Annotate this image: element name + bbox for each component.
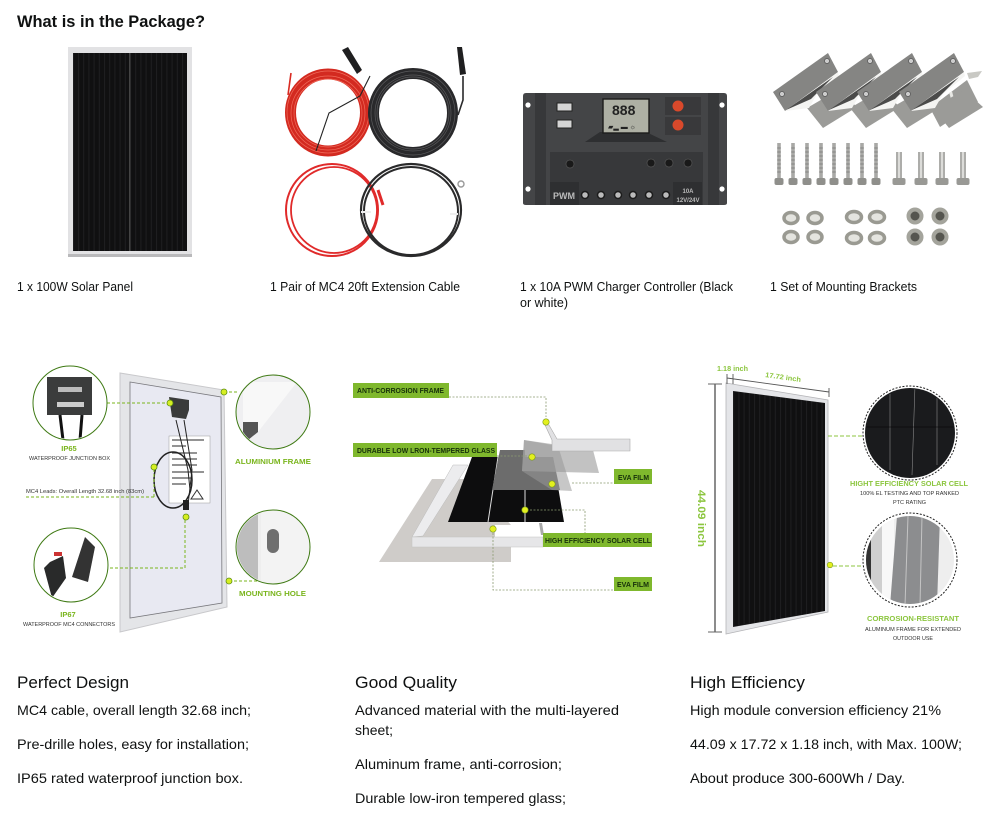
label: width: 17.72 inch	[765, 372, 801, 384]
upper EVA film	[522, 440, 599, 473]
panel back view	[120, 373, 227, 632]
yellow markers	[490, 419, 555, 532]
panel: high efficiency dimensions diagram	[695, 366, 968, 642]
caption: charge controller: or white)	[520, 296, 568, 310]
tag: EVA film lower	[614, 577, 652, 591]
text block: high efficiency	[690, 702, 962, 786]
PWM label: PWM	[553, 191, 575, 201]
text block: perfect design	[17, 702, 251, 786]
second EVA film	[522, 440, 572, 491]
label: mounting hole: MOUNTING HOLE	[239, 591, 306, 598]
label: waterproof MC4 connectors: WATERPROOF MC4 CONNECTORS	[23, 622, 115, 628]
icon: solar panel	[68, 47, 192, 257]
caption: charge controller	[520, 280, 734, 310]
tag: EVA film lower: EVA FILM	[617, 580, 649, 589]
LCD display: ▰▂ ▬ ☼	[608, 124, 636, 131]
caption: brackets: 1 Set of Mounting Brackets	[770, 280, 917, 294]
label: IP67: IP67	[60, 610, 76, 619]
panel: perfect design diagram	[23, 366, 311, 632]
title: What is in the Package?	[17, 12, 205, 31]
callout: junction box	[33, 366, 107, 440]
green markers	[151, 389, 232, 584]
green connectors	[26, 392, 278, 581]
text block: high efficiency: High module conversion efficiency 21%	[690, 702, 941, 718]
caption: solar panel: 1 x 100W Solar Panel	[17, 280, 133, 294]
LCD display: 888	[612, 102, 636, 118]
callout: frame closeup	[863, 513, 957, 607]
framed solar panel	[726, 383, 828, 634]
bottom EVA film	[379, 479, 511, 562]
text block: good quality: Aluminum frame, anti-corrosion;	[355, 756, 562, 772]
caption: charge controller: 1 x 10A PWM Charger Controller (Black	[520, 280, 734, 294]
tag: high efficiency solar cell	[543, 533, 652, 547]
icon: mounting brackets and hardware	[773, 53, 983, 244]
dimension: height bar	[708, 384, 722, 632]
callout: aluminium frame	[236, 375, 310, 449]
caption: extension cable: 1 Pair of MC4 20ft Extension Cable	[270, 280, 460, 294]
aluminium frame	[412, 465, 544, 547]
tag: tempered glass	[353, 443, 497, 457]
text block: perfect design: IP65 rated waterproof junction box.	[17, 770, 243, 786]
label: outdoor use: OUTDOOR USE	[893, 636, 933, 642]
rating label: 12V/24V	[676, 198, 700, 204]
tag: high efficiency solar cell: HIGH EFFICIENCY SOLAR CELL	[545, 536, 651, 545]
tag: anti-corrosion frame	[353, 383, 449, 398]
label: PTC rating: PTC RATING	[893, 500, 926, 506]
label: MC4 leads: MC4 Leads: Overall Length 32.68 inch (83cm)	[26, 489, 144, 495]
text block: high efficiency: 44.09 x 17.72 x 1.18 inch, with Max. 100W;	[690, 736, 962, 752]
rating label	[676, 189, 700, 204]
label: depth: 1.18 inch	[717, 366, 748, 373]
text block: good quality	[355, 702, 619, 806]
dashed leader lines	[449, 397, 614, 590]
tag: anti-corrosion frame: ANTI-CORROSION FRAME	[357, 386, 444, 395]
icon: PWM charge controller	[523, 93, 727, 205]
tag: EVA film upper	[614, 469, 652, 484]
LCD display	[603, 99, 649, 133]
text block: perfect design: MC4 cable, overall length 32.68 inch;	[17, 702, 251, 718]
solar cell	[448, 457, 564, 522]
label: aluminum frame: ALUMINUM FRAME FOR EXTENDED	[865, 627, 961, 633]
text block: good quality: sheet;	[355, 722, 393, 738]
label: waterproof junction box: WATERPROOF JUNCTION BOX	[29, 456, 110, 462]
dimension: width bar	[727, 374, 829, 397]
tag: EVA film upper: EVA FILM	[618, 473, 649, 482]
panel: good quality exploded diagram	[353, 383, 652, 591]
heading: good quality: Good Quality	[355, 673, 457, 692]
label: IP65: IP65	[61, 444, 77, 453]
marker	[827, 562, 833, 568]
text block: good quality: Durable low-iron tempered glass;	[355, 790, 566, 806]
label: aluminium frame: ALUMINIUM FRAME	[235, 459, 311, 466]
white frame opening	[495, 525, 539, 537]
callout: mounting hole	[236, 510, 310, 584]
text block: high efficiency: About produce 300-600Wh / Day.	[690, 770, 905, 786]
text block: good quality: Advanced material with the multi-layered	[355, 702, 619, 718]
callout: solar cell closeup	[863, 385, 957, 480]
tempered glass	[492, 450, 560, 490]
label: EL testing: 100% EL TESTING AND TOP RANKED	[860, 491, 959, 497]
tag: tempered glass: DURABLE LOW LRON-TEMPERED GLASS	[357, 446, 495, 455]
top frame rail	[545, 425, 630, 451]
green leaders	[828, 436, 865, 566]
label: hight efficiency: HIGHT EFFICIENCY SOLAR CELL	[850, 479, 968, 488]
text block: perfect design: Pre-drille holes, easy for installation;	[17, 736, 249, 752]
heading: perfect design: Perfect Design	[17, 673, 129, 692]
heading: high efficiency: High Efficiency	[690, 673, 805, 692]
label: corrosion resistant: CORROSION-RESISTANT	[867, 614, 959, 623]
rating label: 10A	[682, 189, 694, 195]
icon: MC4 extension cables	[286, 47, 466, 256]
label: height: 44.09 inch	[695, 490, 707, 547]
callout: MC4 connectors	[34, 528, 108, 602]
